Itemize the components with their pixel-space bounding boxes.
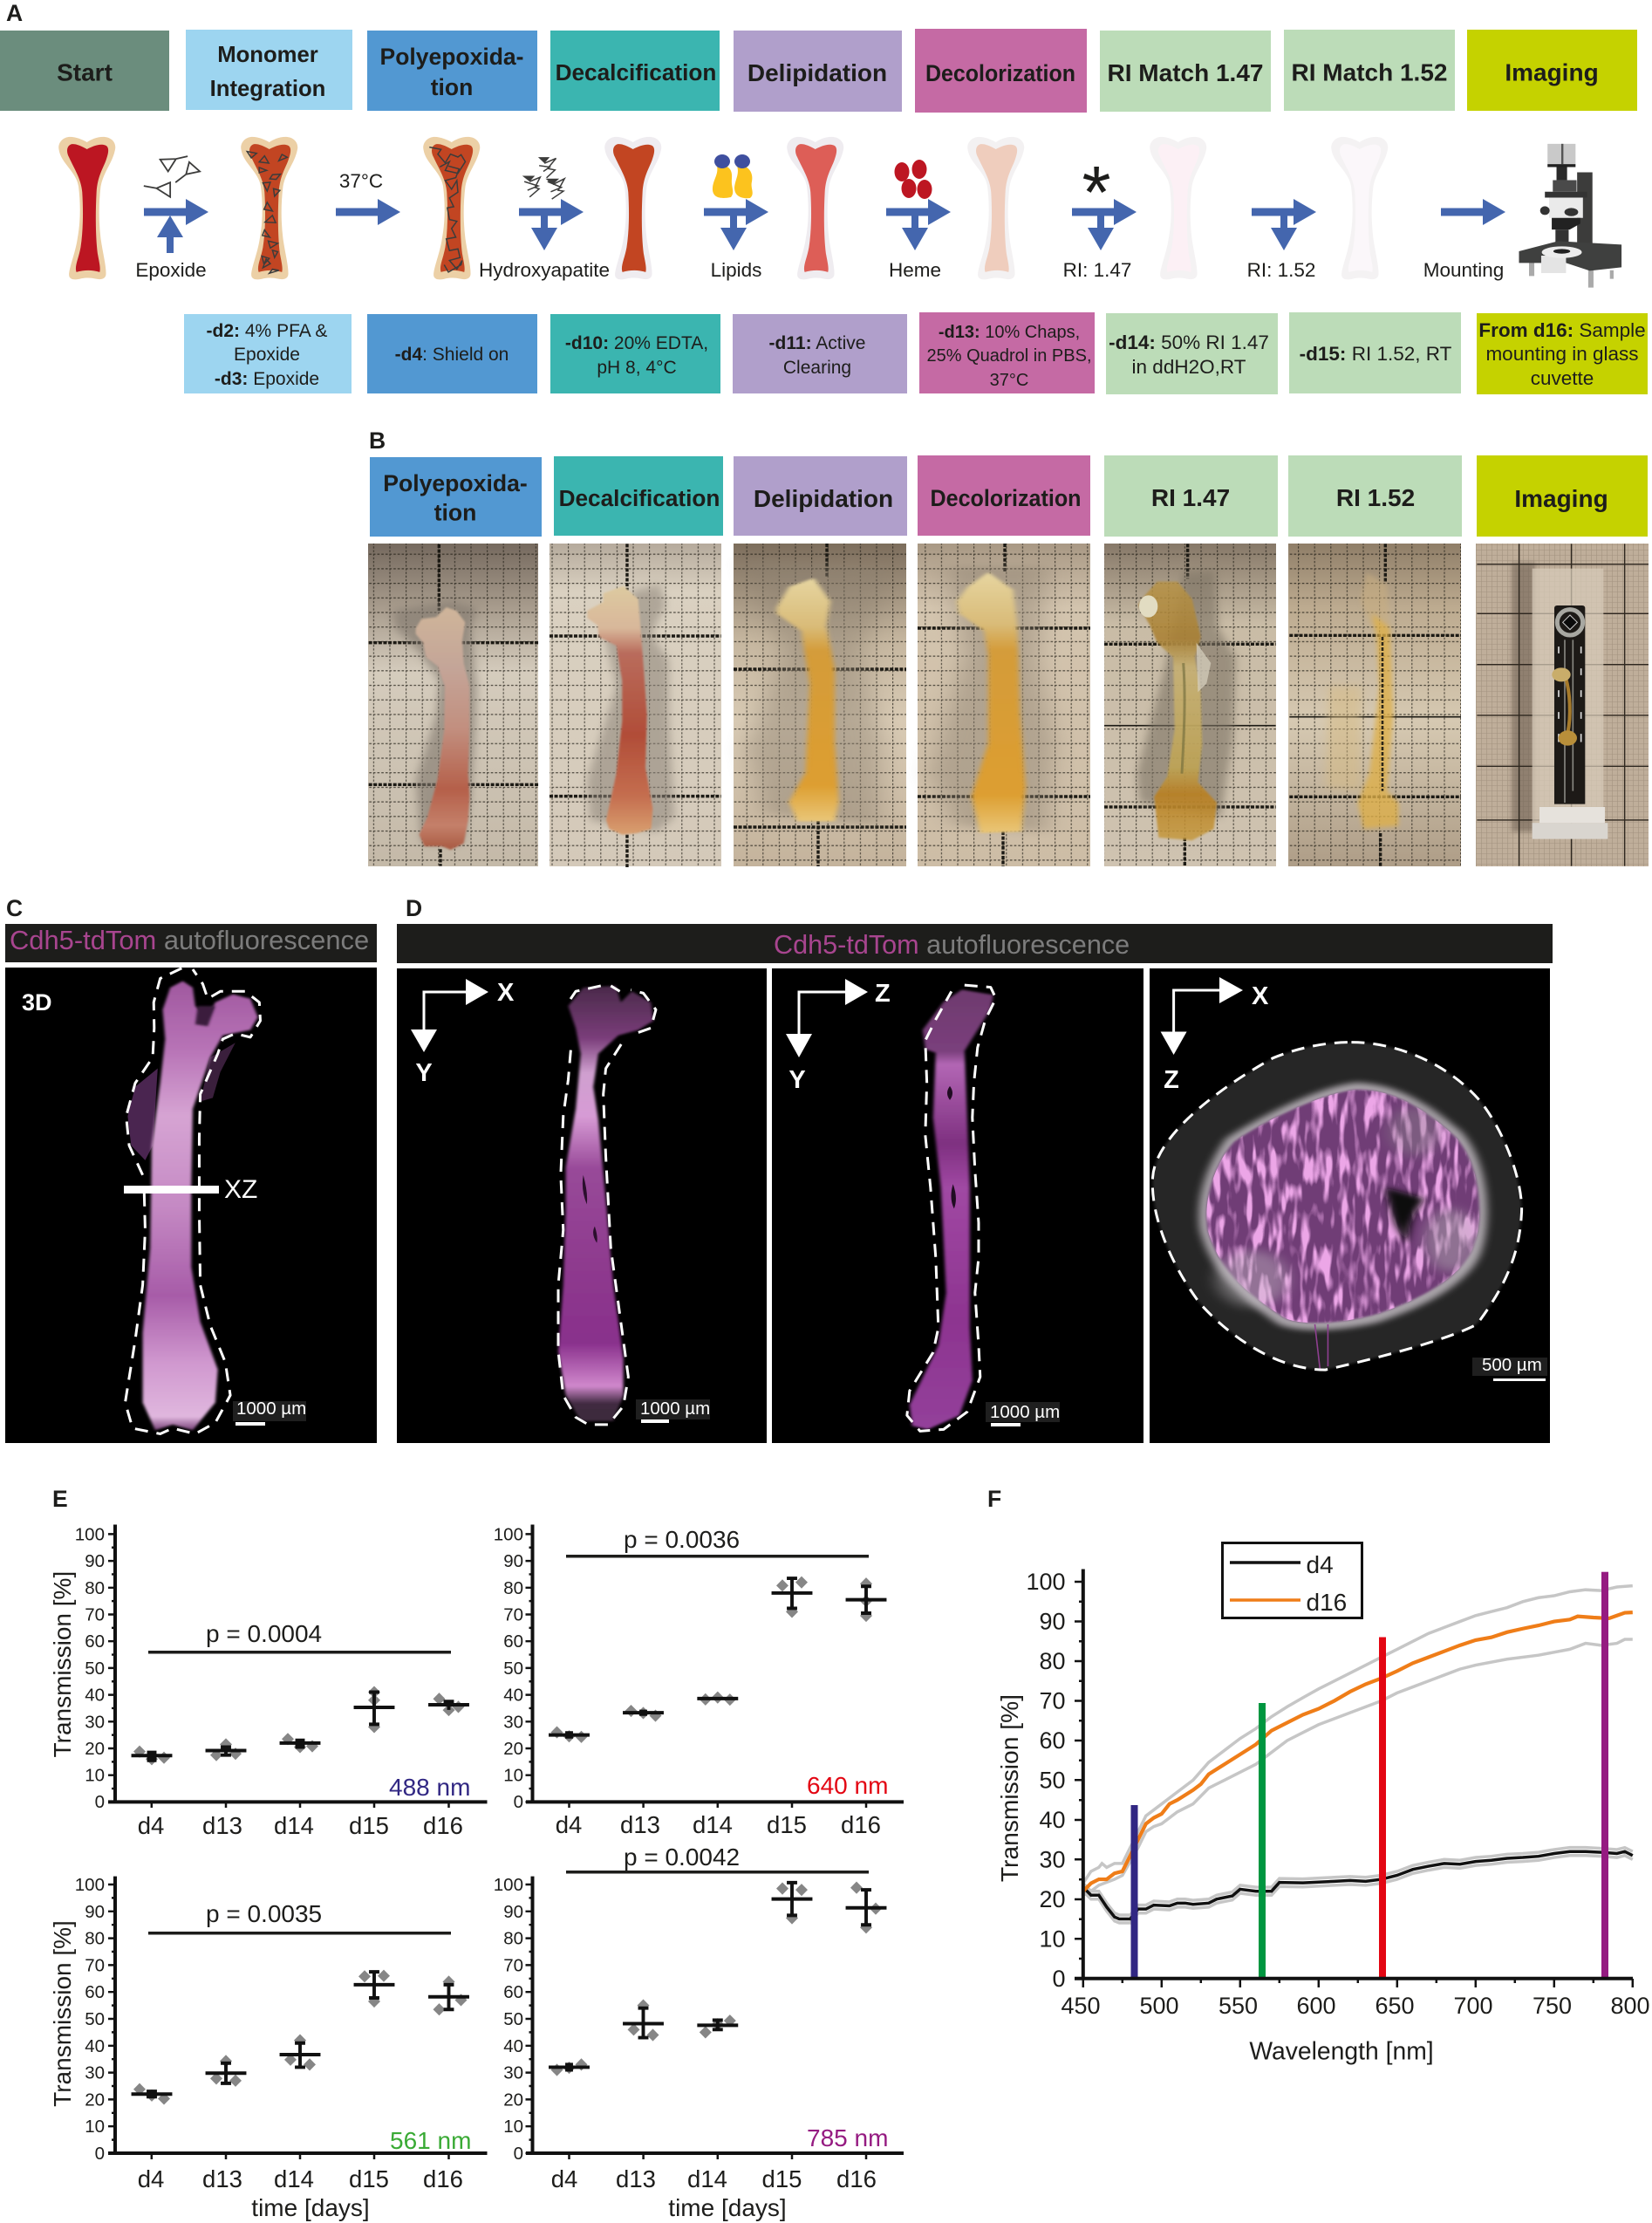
panel A: process arrows [144, 199, 1505, 253]
box: d11: Clearing [783, 358, 851, 378]
box: d2 d3: -d3: Epoxide [215, 369, 319, 389]
box: d4: -d4: Shield on [395, 345, 509, 365]
chart: transmission 785 nm: 30 [503, 2063, 523, 2083]
header: Imaging: Imaging [1505, 59, 1599, 86]
chart: transmission 488 nm: d14 [274, 1812, 314, 1839]
chart: transmission 785 nm: d13 [616, 2165, 656, 2192]
box: d10: -d10: 20% EDTA, [565, 333, 708, 353]
box: d13 [919, 312, 1095, 393]
panel A: process labels: Hydroxyapatite [479, 259, 610, 281]
header: Polyepoxidation [367, 31, 537, 111]
scale bar: 500 um [1472, 1355, 1547, 1381]
box: d2 d3: -d2: 4% PFA & [207, 321, 327, 341]
panel letter B: B [369, 428, 386, 454]
arrows: X Z axes: Z [1164, 1066, 1179, 1094]
arrows: X Z axes [1161, 977, 1269, 1094]
arrow: lipids out [704, 199, 768, 250]
y tick labels: 60 [1039, 1727, 1066, 1754]
x tick labels: 600 [1296, 1993, 1336, 2019]
icon: epoxide monomers [144, 156, 200, 197]
chart: transmission 785 nm: 10 [503, 2117, 523, 2137]
chart: transmission 640 nm: d16 [841, 1811, 881, 1838]
chart: transmission 561 nm: 70 [85, 1955, 105, 1975]
chart: transmission 488 nm: 488 nm [389, 1774, 470, 1801]
arrow: epoxide in [144, 199, 208, 253]
panel A: process labels: 37°C [339, 170, 383, 192]
arrows: Z Y axes: Y [788, 1066, 806, 1094]
chart: transmission 640 nm: 60 [503, 1631, 523, 1652]
marker: XZ section line [124, 1175, 257, 1204]
icon: heme [895, 160, 932, 199]
arrows: X Z axes: X [1252, 982, 1269, 1010]
box: d15 [1289, 312, 1461, 393]
panel B: photo RI 1.52 [1288, 544, 1461, 866]
x tick labels: 550 [1219, 1993, 1258, 2019]
chart: transmission 561 nm: 561 nm [390, 2127, 471, 2154]
chart: transmission 561 nm: d13 [202, 2165, 242, 2192]
header: RI Match 1.52: RI Match 1.52 [1292, 59, 1447, 86]
box: d11 [733, 314, 907, 393]
chart: transmission 488 nm: 60 [85, 1631, 105, 1652]
chart: transmission 561 nm: d16 [423, 2165, 463, 2192]
header: Decalcification: Decalcification [556, 59, 716, 86]
header: RI Match 1.52 [1284, 30, 1455, 111]
header: Delipidation [734, 31, 902, 112]
y tick labels: 90 [1039, 1609, 1066, 1635]
chart: transmission 640 nm: 100 [494, 1524, 523, 1544]
panel A: process labels: Mounting [1423, 259, 1504, 281]
chart: transmission 640 nm: 20 [503, 1739, 523, 1759]
chart: transmission 640 nm: 50 [503, 1659, 523, 1679]
panel letter C: C [6, 895, 23, 921]
chart: transmission 561 nm: 30 [85, 2063, 105, 2083]
box: d13: 25% Quadrol in PBS, [926, 346, 1092, 366]
icon: lipids [713, 154, 753, 198]
panel A: process labels: Heme [889, 259, 941, 281]
chart: transmission 561 nm: p = 0.0035 [206, 1900, 322, 1927]
panel A: bone series [58, 137, 1388, 279]
panel A: step headers [0, 29, 1637, 113]
chart: transmission 488 nm: d16 [423, 1812, 463, 1839]
arrow: hydroxyapatite out [519, 199, 584, 250]
box: d16: cuvette [1531, 367, 1594, 389]
header: RI Match 1.47: RI Match 1.47 [1108, 59, 1263, 86]
header: Start [0, 31, 169, 111]
chart: transmission 640 nm: 640 nm [807, 1772, 888, 1799]
chart: transmission 488 nm: 40 [85, 1686, 105, 1706]
panel A: process labels: Lipids [711, 259, 761, 281]
box: d16: From d16: Sample [1478, 319, 1646, 341]
box: d4 [367, 314, 537, 393]
chart: transmission 488 nm: 50 [85, 1659, 105, 1679]
chart: transmission 785 nm: d4 [551, 2165, 577, 2192]
box: d16 [1477, 313, 1648, 394]
chart: transmission 561 nm: 40 [85, 2036, 105, 2056]
box: d15: -d15: RI 1.52, RT [1300, 343, 1452, 365]
chart: transmission 640 nm: 0 [514, 1792, 523, 1812]
arrow: RI 1.47 [1072, 199, 1137, 250]
y tick labels: 0 [1052, 1966, 1066, 1992]
panel A: process labels: Epoxide [135, 259, 207, 281]
panel B: stage headers: RI 1.52 [1336, 484, 1415, 511]
legend: d16 [1307, 1589, 1347, 1616]
chart: transmission 640 nm: 90 [503, 1551, 523, 1571]
chart: transmission 488 nm: 10 [85, 1766, 105, 1786]
bone: decolorized [967, 137, 1024, 279]
chart: transmission 488 nm: 30 [85, 1712, 105, 1732]
box: d11: -d11: Active [769, 333, 865, 353]
chart: transmission 561 nm: 100 [75, 1875, 105, 1895]
panel B: stage headers: Polyepoxida- [383, 470, 528, 496]
box: d14: -d14: 50% RI 1.47 [1109, 332, 1269, 353]
box: d2 d3 [184, 314, 352, 393]
marker: 785 nm [1601, 1572, 1608, 1979]
chart: transmission 640 nm: 30 [503, 1712, 523, 1732]
bone: decalcified [604, 137, 661, 279]
panel B: stage headers: Delipidation [754, 485, 893, 512]
panel A: day protocol boxes [184, 312, 1648, 394]
chart: transmission 561 nm: 60 [85, 1982, 105, 2002]
arrows: X Y axes: Y [415, 1059, 433, 1087]
chart: transmission 785 nm: time [days] [668, 2194, 787, 2221]
header: Monomer Integration: Monomer [217, 43, 318, 67]
x tick labels: 800 [1610, 1993, 1650, 2019]
header: RI Match 1.47 [1100, 31, 1271, 112]
panel B: stage headers: Decalcification [559, 485, 720, 511]
panel D: legend bar [397, 924, 1553, 963]
panel B: photo decolorization [918, 544, 1090, 866]
chart: transmission 561 nm: 10 [85, 2117, 105, 2137]
panel B: stage headers: Decolorization [930, 485, 1082, 511]
chart: transmission 640 nm: d14 [693, 1811, 733, 1838]
chart: transmission 640 nm [494, 1524, 904, 1838]
label: 3D: 3D [22, 989, 52, 1016]
chart: transmission spectrum [995, 1542, 1650, 2064]
header: Polyepoxidation: Polyepoxida- [380, 44, 523, 70]
scale bar: 1000 um: 1000 µm [990, 1402, 1060, 1422]
panel D: XY section [397, 968, 767, 1443]
header: Delipidation: Delipidation [747, 59, 887, 86]
chart: transmission 640 nm: 10 [503, 1766, 523, 1786]
curves: d4 and d16 with error bounds [1083, 1586, 1633, 1923]
icon: microscope [1519, 144, 1621, 288]
legend: d4 [1307, 1551, 1334, 1578]
header: Polyepoxidation: tion [431, 74, 473, 100]
arrows: X Y axes: X [497, 979, 515, 1007]
legend [1223, 1542, 1362, 1618]
y tick labels: 100 [1026, 1569, 1066, 1595]
marker: 488 nm [1130, 1805, 1137, 1979]
panel letter F: F [987, 1486, 1001, 1512]
bone: monomer [241, 137, 297, 279]
x axis title: Wavelength [nm] [1249, 2036, 1434, 2064]
chart: transmission 488 nm: 20 [85, 1739, 105, 1759]
chart: transmission 488 nm: d4 [138, 1812, 164, 1839]
chart: transmission 785 nm: d15 [762, 2165, 802, 2192]
panel D: legend bar: Cdh5-tdTom autofluorescence [774, 930, 1130, 960]
chart: transmission 640 nm: p = 0.0036 [624, 1526, 740, 1553]
arrows: Z Y axes: Z [875, 980, 891, 1008]
scale bar: 500 um: 500 µm [1482, 1355, 1542, 1375]
panel letter D: D [406, 895, 422, 921]
bone: RI 1.47 [1150, 137, 1206, 279]
chart: transmission 785 nm: 785 nm [807, 2124, 888, 2151]
panel B: photo decalcification [550, 544, 721, 867]
axes [1075, 1569, 1633, 1979]
y tick labels: 20 [1039, 1886, 1066, 1912]
box: d14 [1106, 313, 1278, 394]
box: d10: pH 8, 4°C [597, 358, 677, 378]
panel B: photo imaging cuvette [1476, 544, 1649, 866]
chart: transmission 488 nm: 80 [85, 1578, 105, 1598]
box: d14: in ddH2O,RT [1132, 356, 1246, 378]
y tick labels: 50 [1039, 1768, 1066, 1794]
chart: transmission 561 nm: 20 [85, 2090, 105, 2110]
x tick labels [1061, 1993, 1650, 2019]
y axis title: Transmission [%] [995, 1694, 1023, 1882]
scale bar: 1000 um: 1000 µm [640, 1399, 710, 1419]
panel B: photo polyepoxidation [368, 544, 538, 866]
chart: transmission 561 nm: 80 [85, 1929, 105, 1949]
chart: transmission 488 nm: d15 [349, 1812, 389, 1839]
panel B: stage headers: tion [434, 499, 476, 525]
box: d13: -d13: 10% Chaps, [939, 323, 1080, 342]
panel B: stage headers [370, 455, 1648, 537]
arrows: Z Y axes [786, 979, 891, 1094]
panel letter A: A [6, 0, 23, 26]
y tick labels: 10 [1039, 1926, 1066, 1953]
box: d2 d3: Epoxide [234, 345, 300, 365]
chart: transmission 640 nm: d4 [556, 1811, 582, 1838]
chart: transmission 785 nm: 40 [503, 2036, 523, 2056]
arrow: mounting [1441, 199, 1505, 225]
chart: transmission 561 nm: d15 [349, 2165, 389, 2192]
header: Decolorization: Decolorization [925, 60, 1075, 86]
box: d10 [550, 314, 720, 393]
x tick labels: 500 [1139, 1993, 1179, 2019]
chart: transmission 785 nm: 60 [503, 1982, 523, 2002]
box: d16: mounting in glass [1485, 343, 1639, 365]
panel B: stage headers: Imaging [1514, 485, 1608, 512]
header: Decolorization [915, 29, 1087, 113]
chart: transmission 640 nm: 40 [503, 1686, 523, 1706]
header: Imaging [1467, 30, 1637, 111]
panel A: process labels: RI: 1.47 [1063, 259, 1131, 281]
bone: start [58, 137, 115, 279]
y tick labels: 30 [1039, 1846, 1066, 1872]
box: d13: 37°C [990, 371, 1028, 390]
panel C: 3D bone image [5, 968, 377, 1443]
arrows: X Y axes [411, 979, 515, 1087]
chart: transmission 561 nm: d14 [274, 2165, 314, 2192]
header: Monomer Integration: Integration [210, 77, 325, 101]
panel B: photo delipidation [734, 544, 906, 866]
x tick labels: 450 [1061, 1993, 1101, 2019]
icon: asterisk: * [1082, 152, 1111, 235]
chart: transmission 785 nm: 0 [514, 2144, 523, 2164]
chart: transmission 561 nm: 90 [85, 1902, 105, 1922]
chart: transmission 785 nm: 100 [494, 1875, 523, 1895]
panel letter E: E [52, 1486, 68, 1512]
chart: transmission 785 nm: d14 [687, 2165, 727, 2192]
marker: 640 nm [1379, 1637, 1386, 1979]
bone: delipidated [787, 137, 843, 279]
panel B: photo RI 1.47 [1104, 544, 1276, 866]
y tick labels: 40 [1039, 1807, 1066, 1833]
chart: transmission 785 nm: 80 [503, 1929, 523, 1949]
chart: transmission 785 nm: 20 [503, 2090, 523, 2110]
panel A: process labels: RI: 1.52 [1247, 259, 1315, 281]
x tick labels: 750 [1533, 1993, 1572, 2019]
chart: transmission 561 nm: time [days] [251, 2194, 370, 2221]
chart: transmission 488 nm: 90 [85, 1551, 105, 1571]
marker: XZ section line: XZ [224, 1175, 257, 1204]
icon: hydroxyapatite crystals [522, 157, 564, 199]
y tick labels: 70 [1039, 1687, 1066, 1713]
panel D: YZ section [772, 968, 1143, 1443]
bone: RI 1.52 [1331, 137, 1388, 279]
chart: transmission 640 nm: 80 [503, 1578, 523, 1598]
chart: transmission 785 nm: d16 [836, 2165, 877, 2192]
chart: transmission 785 nm: 50 [503, 2009, 523, 2029]
marker: 561 nm [1259, 1703, 1266, 1979]
chart: transmission 561 nm: d4 [138, 2165, 164, 2192]
arrow: heme out [886, 199, 951, 250]
panel C: legend bar: Cdh5-tdTom autofluorescence [10, 925, 369, 955]
chart: transmission 561 nm [49, 1875, 487, 2221]
panel B: stage headers: RI 1.47 [1151, 484, 1230, 511]
arrow: RI 1.52 [1252, 199, 1316, 250]
panel A: process labels [135, 170, 1504, 281]
chart: transmission 640 nm: d15 [767, 1811, 807, 1838]
chart: transmission 561 nm: 0 [95, 2144, 105, 2164]
chart: transmission 561 nm: 50 [85, 2009, 105, 2029]
panel D: XZ cross section [1150, 968, 1550, 1443]
chart: transmission 785 nm: p = 0.0042 [624, 1843, 740, 1871]
header: Decalcification [550, 31, 720, 111]
y tick labels [1026, 1569, 1066, 1992]
chart: transmission 561 nm: Transmission [%] [49, 1920, 76, 2107]
bone: polymerised [423, 137, 480, 279]
chart: transmission 785 nm [494, 1843, 904, 2221]
chart: transmission 488 nm: 0 [95, 1792, 105, 1812]
x tick labels: 650 [1375, 1993, 1415, 2019]
y tick labels: 80 [1039, 1648, 1066, 1674]
chart: transmission 488 nm: p = 0.0004 [206, 1620, 322, 1647]
chart: transmission 488 nm: 100 [75, 1524, 105, 1544]
chart: transmission 488 nm: d13 [202, 1812, 242, 1839]
chart: transmission 640 nm: d13 [620, 1811, 660, 1838]
header: Start: Start [57, 59, 113, 86]
chart: transmission 488 nm: 70 [85, 1605, 105, 1624]
arrow: 37 C [336, 199, 400, 225]
chart: transmission 785 nm: 70 [503, 1955, 523, 1975]
scale bar: 1000 um: 1000 µm [236, 1399, 306, 1419]
chart: transmission 640 nm: 70 [503, 1605, 523, 1624]
chart: transmission 488 nm [49, 1524, 487, 1839]
chart: transmission 488 nm: Transmission [%] [49, 1571, 76, 1757]
header: Monomer Integration [186, 30, 352, 110]
x tick labels: 700 [1453, 1993, 1493, 2019]
chart: transmission 785 nm: 90 [503, 1902, 523, 1922]
